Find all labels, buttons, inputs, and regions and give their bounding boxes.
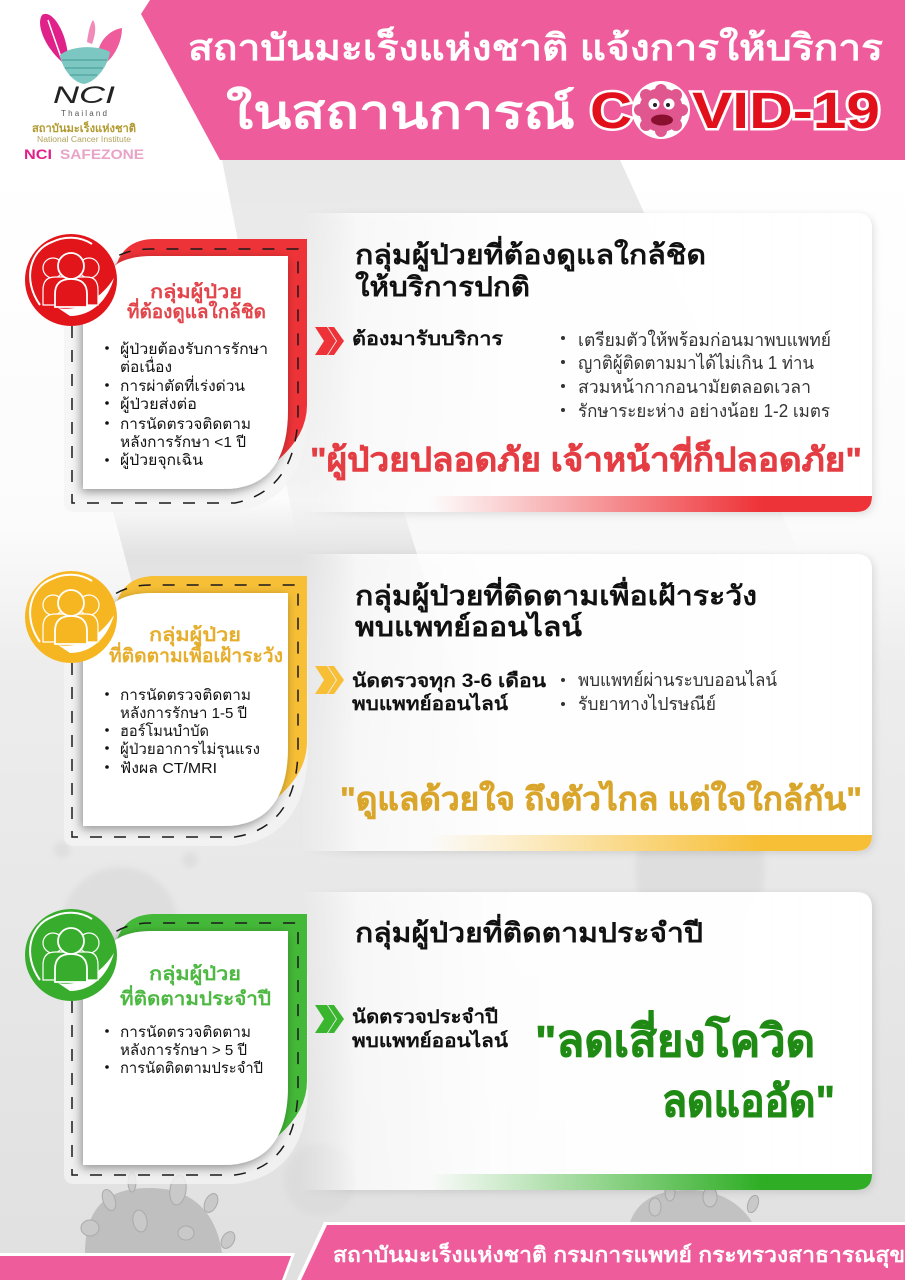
- list: group 3: การนัดติดตามประจำปี: [120, 1060, 263, 1077]
- arrow: green chevrons: [315, 1005, 344, 1033]
- panel: group 3 details: [300, 892, 872, 1190]
- heading: group 3: กลุ่มผู้ป่วยที่ติดตามประจำปี: [355, 913, 703, 950]
- heading: group 1: ให้บริการปกติ: [355, 271, 530, 302]
- list: group 3: [105, 1024, 263, 1077]
- heading: group 2: พบแพทย์ออนไลน์: [355, 611, 583, 642]
- footer text: สถาบันมะเร็งแห่งชาติ กรมการแพทย์ กระทรวงสาธารณสุข: [333, 1241, 905, 1269]
- progress bar: green: [430, 1174, 872, 1190]
- icon: group 2 people in hand: [25, 571, 117, 663]
- list: guidance: พบแพทย์ผ่านระบบออนไลน์: [578, 669, 777, 690]
- header band: [24, 0, 905, 162]
- list: group 3: หลังการรักษา > 5 ปี: [120, 1042, 247, 1059]
- logo: NCI: [53, 82, 115, 109]
- list: group 1: ผู้ป่วยส่งต่อ: [120, 396, 197, 413]
- list: group 2: ฮอร์โมนบำบัด: [120, 722, 209, 740]
- heading: group 1: กลุ่มผู้ป่วยที่ต้องดูแลใกล้ชิด: [355, 235, 706, 272]
- logo: National Cancer Institute: [37, 135, 132, 144]
- heading: group 2: กลุ่มผู้ป่วยที่ติดตามเพื่อเฝ้าระวัง: [355, 576, 757, 613]
- list: guidance: ญาติผู้ติดตามมาได้ไม่เกิน 1 ท่าน: [578, 352, 814, 374]
- list: group 1: [105, 341, 268, 470]
- title: สถาบันมะเร็งแห่งชาติ แจ้งการให้บริการ: [188, 25, 884, 68]
- panel: group 1 details: [300, 213, 872, 512]
- arrow: yellow chevrons: [315, 666, 344, 694]
- list: guidance: [561, 669, 777, 714]
- logo: [24, 14, 144, 162]
- action label: ต้องมารับบริการ: [352, 328, 504, 350]
- list: group 2: [105, 687, 260, 777]
- card title: กลุ่มผู้ป่วย: [149, 624, 241, 647]
- virus illustration left: [81, 1172, 238, 1253]
- logo: Thailand: [61, 109, 107, 118]
- list: group 3: การนัดตรวจติดตาม: [120, 1024, 251, 1041]
- card title: [109, 624, 283, 667]
- quote: red: "ผู้ป่วยปลอดภัย เจ้าหน้าที่ก็ปลอดภัย": [310, 436, 862, 481]
- title: ในสถานการณ์: [226, 85, 575, 138]
- action label: นัดตรวจประจำปี: [352, 1006, 498, 1028]
- faint virus decorations: [54, 805, 765, 1216]
- icon: virus mascot: [632, 81, 690, 139]
- list: group 2: ฟังผล CT/MRI: [120, 760, 217, 777]
- icon: group 1 people in hand: [25, 234, 117, 326]
- card title: กลุ่มผู้ป่วย: [149, 963, 241, 986]
- panel: group 3 summary card: [25, 909, 308, 1184]
- list: group 1: ผู้ป่วยต้องรับการรักษา: [120, 341, 268, 358]
- list: guidance: รักษาระยะห่าง อย่างน้อย 1-2 เมตร: [578, 401, 830, 421]
- footer: [0, 1222, 905, 1280]
- list: guidance: [561, 329, 831, 421]
- panel: group 2 details: [300, 554, 872, 851]
- action label: พบแพทย์ออนไลน์: [352, 1029, 508, 1052]
- virus illustration right: [630, 1183, 761, 1222]
- quote: green: ลดแออัด": [662, 1077, 835, 1126]
- quote: yellow: "ดูแลด้วยใจ ถึงตัวไกล แต่ใจใกล้กัน": [340, 780, 862, 820]
- card title: [127, 281, 266, 324]
- logo: SAFEZONE: [60, 146, 144, 162]
- action label: [352, 1006, 508, 1052]
- heading: group 1: [355, 235, 706, 302]
- action label: นัดตรวจทุก 3-6 เดือน: [352, 670, 546, 693]
- logo: NCI: [24, 146, 52, 162]
- quote: green: [535, 1010, 835, 1126]
- progress bar: yellow: [430, 835, 872, 851]
- list: group 1: ต่อเนื่อง: [120, 356, 172, 376]
- card title: ที่ติดตามประจำปี: [120, 985, 271, 1010]
- action label: [352, 670, 546, 715]
- icon: group 3 people in hand: [25, 909, 117, 1001]
- arrow: red chevrons: [315, 327, 344, 355]
- COVID-19 lettering: C: [590, 82, 632, 139]
- logo: สถาบันมะเร็งแห่งชาติ: [32, 121, 136, 135]
- panel: group 1 summary card: [25, 234, 308, 512]
- COVID-19 lettering: VID-19: [692, 82, 880, 139]
- panel: group 2 summary card: [25, 571, 308, 846]
- list: guidance: รับยาทางไปรษณีย์: [578, 693, 716, 714]
- card title: ที่ติดตามเพื่อเฝ้าระวัง: [109, 642, 283, 667]
- list: group 2: ผู้ป่วยอาการไม่รุนแรง: [120, 740, 260, 759]
- COVID-19 lettering: [590, 81, 880, 139]
- list: guidance: สวมหน้ากากอนามัยตลอดเวลา: [578, 377, 811, 397]
- progress bar: red: [430, 496, 872, 512]
- quote: green: "ลดเสี่ยงโควิด: [535, 1010, 815, 1066]
- list: group 1: การนัดตรวจติดตาม: [120, 416, 251, 433]
- heading: group 2: [355, 576, 757, 642]
- list: guidance: เตรียมตัวให้พร้อมก่อนมาพบแพทย์: [578, 329, 831, 350]
- card title: กลุ่มผู้ป่วย: [150, 281, 242, 304]
- list: group 2: หลังการรักษา 1-5 ปี: [120, 705, 247, 722]
- card title: ที่ต้องดูแลใกล้ชิด: [127, 298, 266, 324]
- list: group 1: ผู้ป่วยจุกเฉิน: [120, 452, 203, 470]
- list: group 1: การผ่าตัดที่เร่งด่วน: [120, 375, 245, 395]
- title: [188, 25, 884, 138]
- list: group 1: หลังการรักษา <1 ปี: [120, 434, 246, 451]
- action label: พบแพทย์ออนไลน์: [352, 692, 508, 715]
- list: group 2: การนัดตรวจติดตาม: [120, 687, 251, 704]
- card title: [120, 963, 271, 1010]
